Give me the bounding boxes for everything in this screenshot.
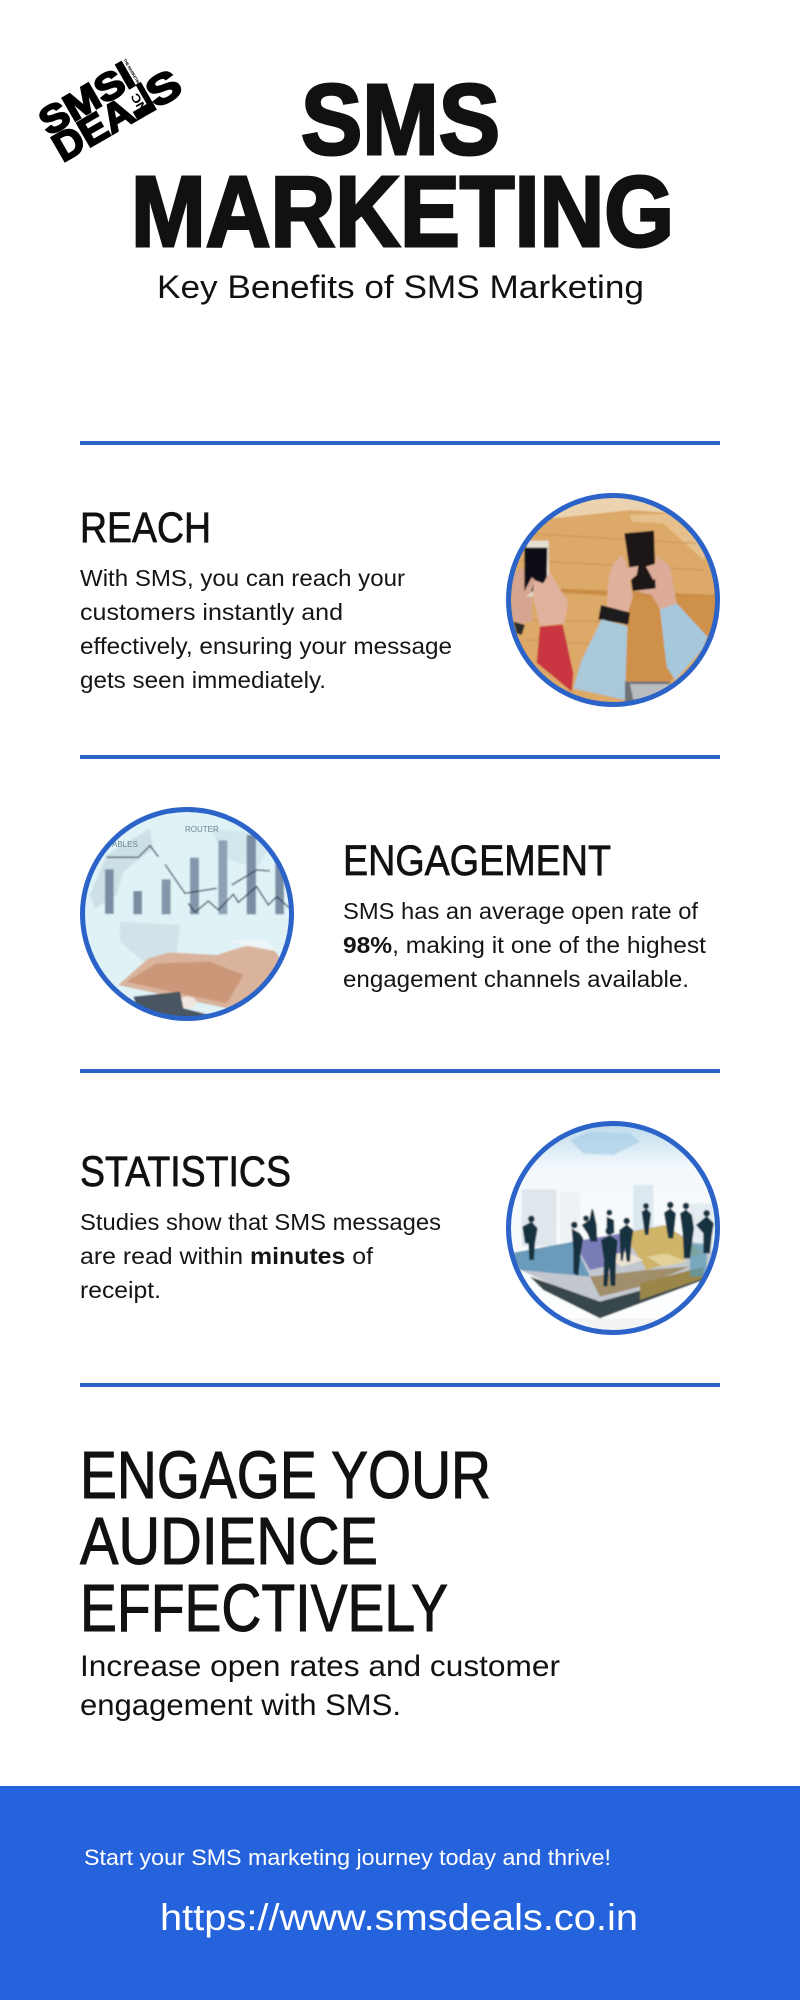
heading: engage your audience: ENGAGE YOUR (80, 1438, 491, 1513)
footer tagline: Start your SMS marketing journey today and thrive! (84, 1845, 611, 1870)
text: reach description: With SMS, you can reach your (80, 565, 405, 591)
footer band (0, 1786, 800, 2000)
text: reach description (80, 565, 452, 693)
logo: SMS Deals: SMS (32, 62, 133, 144)
image: business people on chessboard (503, 1120, 723, 1337)
text: reach description: effectively, ensuring your message (80, 633, 452, 659)
image: chart and typing hand (77, 805, 300, 1025)
text: statistics description: are read within minutes of (80, 1243, 374, 1269)
text: statistics description (80, 1209, 441, 1303)
logo: SMS Deals: DEA (45, 89, 142, 171)
panel: reach (80, 493, 723, 707)
logo: SMS Deals (31, 38, 189, 171)
heading: engagement: ENGAGEMENT (343, 838, 611, 885)
text: call to action description (80, 1650, 560, 1722)
panel: engagement (77, 805, 707, 1025)
text: statistics description: receipt. (80, 1277, 161, 1303)
logo: SMS Deals: THE MARKETING PEOPLE (122, 58, 150, 101)
footer URL: https://www.smsdeals.co.in (160, 1897, 638, 1938)
text: engagement description (343, 898, 707, 992)
left phone (527, 541, 549, 597)
heading: engage your audience: EFFECTIVELY (80, 1571, 448, 1646)
image: chart and typing hand: ABLES (112, 840, 138, 849)
logo: SMS Deals: S (138, 60, 189, 117)
main phone (624, 531, 656, 591)
panel: call to action (80, 1438, 560, 1722)
image: chart and typing hand: ROUTER (185, 825, 219, 834)
left person hands (512, 567, 533, 624)
section divider (80, 1383, 720, 1387)
text: call to action description: Increase open rates and customer (80, 1650, 560, 1683)
text: statistics description: Studies show that SMS messages (80, 1209, 441, 1235)
logo: SMS Deals: INC (128, 90, 152, 118)
panel: statistics (80, 1120, 723, 1337)
text: reach description: customers instantly and (80, 599, 343, 625)
heading: engage your audience (80, 1438, 491, 1646)
subtitle: Key Benefits of SMS Marketing (157, 269, 644, 305)
section divider (80, 1069, 720, 1073)
text: reach description: gets seen immediately. (80, 667, 326, 693)
title: SMS (301, 64, 500, 176)
main person hands (607, 555, 633, 612)
text: engagement description: SMS has an average open rate of (343, 898, 699, 924)
image: hands holding phones (503, 493, 723, 707)
heading: reach: REACH (80, 505, 211, 552)
text: call to action description: engagement with SMS. (80, 1689, 401, 1722)
title (131, 64, 674, 268)
heading: engage your audience: AUDIENCE (80, 1504, 378, 1579)
title: MARKETING (131, 156, 674, 268)
text: engagement description: 98%, making it one of the highest (343, 932, 707, 958)
section divider (80, 441, 720, 445)
heading: statistics: STATISTICS (80, 1149, 291, 1196)
section divider (80, 755, 720, 759)
text: engagement description: engagement channels available. (343, 966, 689, 992)
